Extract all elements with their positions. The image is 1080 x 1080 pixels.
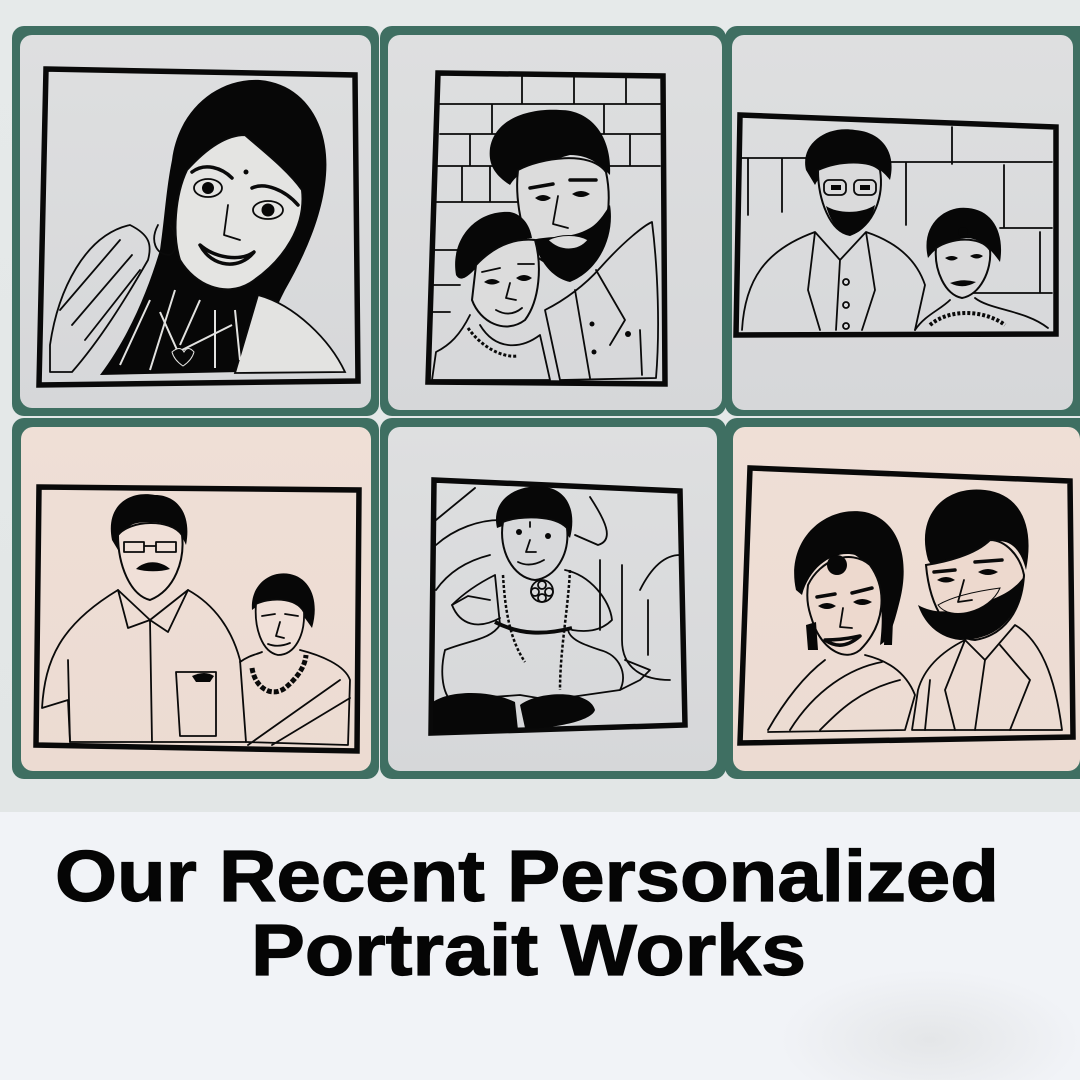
frame: couple portrait xyxy=(428,73,665,384)
panel: child portrait xyxy=(380,418,726,779)
panel: couple portrait in landscape frame xyxy=(725,26,1080,416)
brick wall lines xyxy=(432,76,660,312)
eyes and mouth xyxy=(192,167,298,264)
woman xyxy=(432,212,550,380)
man xyxy=(42,494,246,742)
panel: older couple portrait xyxy=(12,418,379,779)
vehicle background lines xyxy=(436,488,680,680)
title line 2: Portrait Works xyxy=(251,911,806,991)
frame: woman portrait xyxy=(39,69,358,385)
frame: child portrait xyxy=(431,480,685,733)
shoulders and clothing xyxy=(50,225,345,373)
panel: portrait of a woman with long hair xyxy=(12,26,379,416)
title line 1: Our Recent Personalized xyxy=(55,837,999,917)
woman xyxy=(240,573,350,745)
woman xyxy=(915,208,1048,330)
frame: older couple xyxy=(36,487,359,751)
frame: landscape couple xyxy=(736,115,1056,335)
hair strands xyxy=(120,290,240,370)
man xyxy=(490,110,658,380)
panel: couple portrait with brick wall xyxy=(380,26,726,416)
hair xyxy=(100,80,326,375)
lower white title band xyxy=(0,812,1080,1080)
frame: young couple xyxy=(740,468,1073,743)
panel: young couple portrait xyxy=(725,418,1080,779)
child xyxy=(433,486,650,733)
photo wall background xyxy=(0,0,1080,812)
face xyxy=(176,135,302,289)
title xyxy=(55,837,999,991)
brick wall lines xyxy=(742,127,1052,293)
woman xyxy=(768,511,915,732)
man xyxy=(912,489,1062,730)
man xyxy=(742,129,925,330)
